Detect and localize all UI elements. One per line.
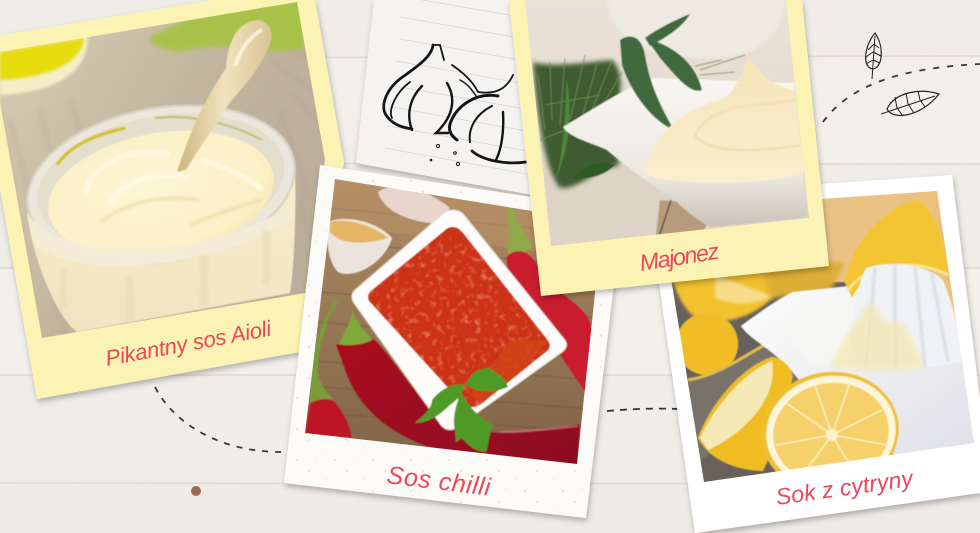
long chilli: [336, 310, 580, 465]
panel: Majonez polaroid: [509, 0, 829, 296]
card: [645, 175, 980, 533]
white dish: [352, 210, 566, 430]
caption: Sok z cytryny: [774, 465, 916, 510]
panel: Sok z cytryny polaroid: [640, 175, 980, 533]
photo: mayonnaise in white dish: [520, 0, 815, 250]
tarragon leaf: [620, 14, 702, 130]
mayonnaise swirl: [645, 55, 805, 183]
icon: vertical leaf: [866, 33, 881, 79]
caption: Sos chilli: [385, 461, 493, 502]
caption: Pikantny sos Aioli: [103, 316, 274, 371]
icon: horizontal leaf: [881, 91, 939, 116]
photo: lemons and juicer: [672, 191, 974, 482]
photo: chilli sauce: [305, 179, 596, 464]
spoon: [177, 20, 272, 172]
caption: Majonez: [638, 238, 721, 276]
sauce: [360, 225, 555, 415]
squeezed lemon: [698, 357, 793, 471]
cut lemon: [762, 371, 900, 472]
glass bowl: [27, 167, 295, 332]
garlic cloves: [327, 186, 450, 274]
crumb: [191, 486, 201, 496]
red chilli right: [506, 199, 593, 392]
photo: aioli in glass bowl: [0, 0, 340, 350]
icon: garlic outline: [384, 45, 526, 166]
white dish: [563, 78, 808, 227]
dashed path centre: [607, 409, 680, 411]
dashed path left: [155, 387, 282, 452]
card: [0, 0, 344, 399]
panel: Pikantny sos Aioli polaroid: [0, 0, 344, 399]
card: [509, 0, 829, 296]
cream: [48, 130, 274, 250]
panel: Sos chilli polaroid: [284, 165, 618, 518]
juicer: [741, 285, 974, 455]
red chilli left small: [305, 300, 352, 438]
dashed path right: [823, 64, 980, 122]
herbs: [533, 55, 745, 188]
parsley: [415, 368, 508, 452]
card: [284, 165, 618, 518]
panel: notepaper with garlic: [354, 0, 530, 197]
